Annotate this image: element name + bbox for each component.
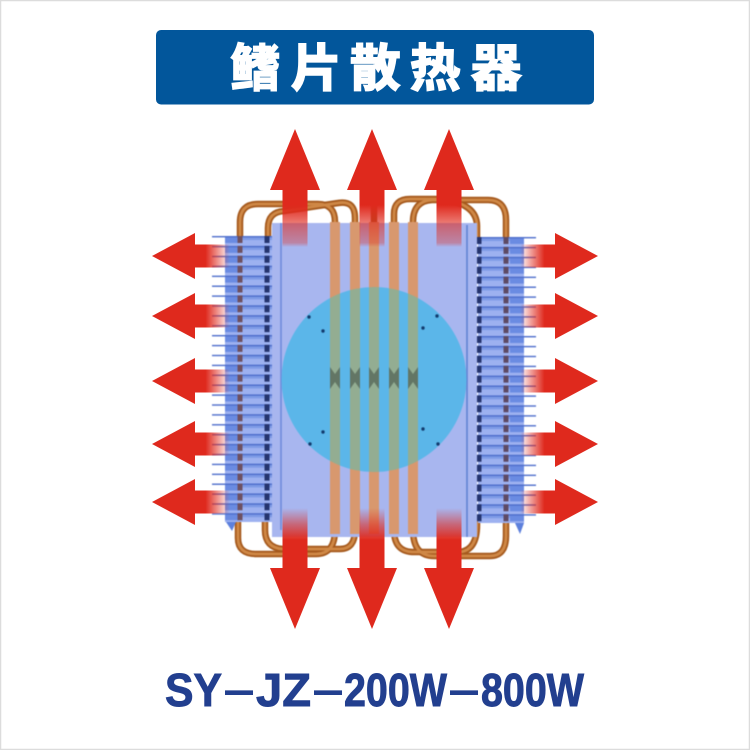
model number: SY bbox=[165, 664, 222, 716]
cyan contact circle bbox=[282, 287, 466, 472]
arrow down 1 bbox=[270, 508, 320, 629]
model number: — bbox=[225, 663, 253, 715]
right fin stack bbox=[478, 237, 536, 534]
title text: 鳍片散热器 bbox=[230, 40, 522, 97]
pipe outline bbox=[238, 199, 506, 556]
model number: — bbox=[450, 663, 478, 715]
strip pinch marks bbox=[330, 367, 418, 389]
arrow down 2 bbox=[347, 508, 397, 629]
arrow up 2 bbox=[347, 129, 397, 247]
arrow right 4 bbox=[520, 421, 598, 467]
arrow up 3 bbox=[424, 129, 474, 247]
heat arrows down bbox=[270, 508, 474, 629]
right fin tube columns bbox=[479, 237, 506, 523]
mounting holes bbox=[307, 314, 440, 446]
arrow left 3 bbox=[152, 358, 230, 404]
arrow right 2 bbox=[520, 293, 598, 339]
left fin tube columns bbox=[240, 236, 267, 522]
model number bbox=[165, 663, 584, 716]
heat arrows up bbox=[270, 129, 474, 247]
pipe highlight bbox=[238, 199, 506, 556]
heat arrows right bbox=[520, 233, 598, 525]
heat arrows left bbox=[152, 233, 230, 525]
model number: JZ bbox=[256, 664, 311, 716]
title banner bbox=[156, 30, 594, 104]
model number: — bbox=[314, 663, 342, 715]
arrow left 4 bbox=[152, 421, 230, 467]
model number: 800W bbox=[481, 664, 584, 716]
arrow up 1 bbox=[270, 129, 320, 247]
heat sink illustration bbox=[212, 199, 536, 556]
arrow left 1 bbox=[152, 233, 230, 279]
heat pipes behind plate bbox=[238, 199, 506, 556]
base plate bbox=[272, 223, 477, 537]
green strip sections inside circle bbox=[330, 280, 418, 480]
arrow down 3 bbox=[424, 508, 474, 629]
arrow right 1 bbox=[520, 233, 598, 279]
copper flat strips bbox=[330, 222, 418, 534]
arrow left 2 bbox=[152, 293, 230, 339]
model number: 200W bbox=[344, 664, 447, 716]
arrow left 5 bbox=[152, 479, 230, 525]
arrow right 3 bbox=[520, 358, 598, 404]
left fin stack bbox=[212, 236, 272, 531]
arrow right 5 bbox=[520, 479, 598, 525]
